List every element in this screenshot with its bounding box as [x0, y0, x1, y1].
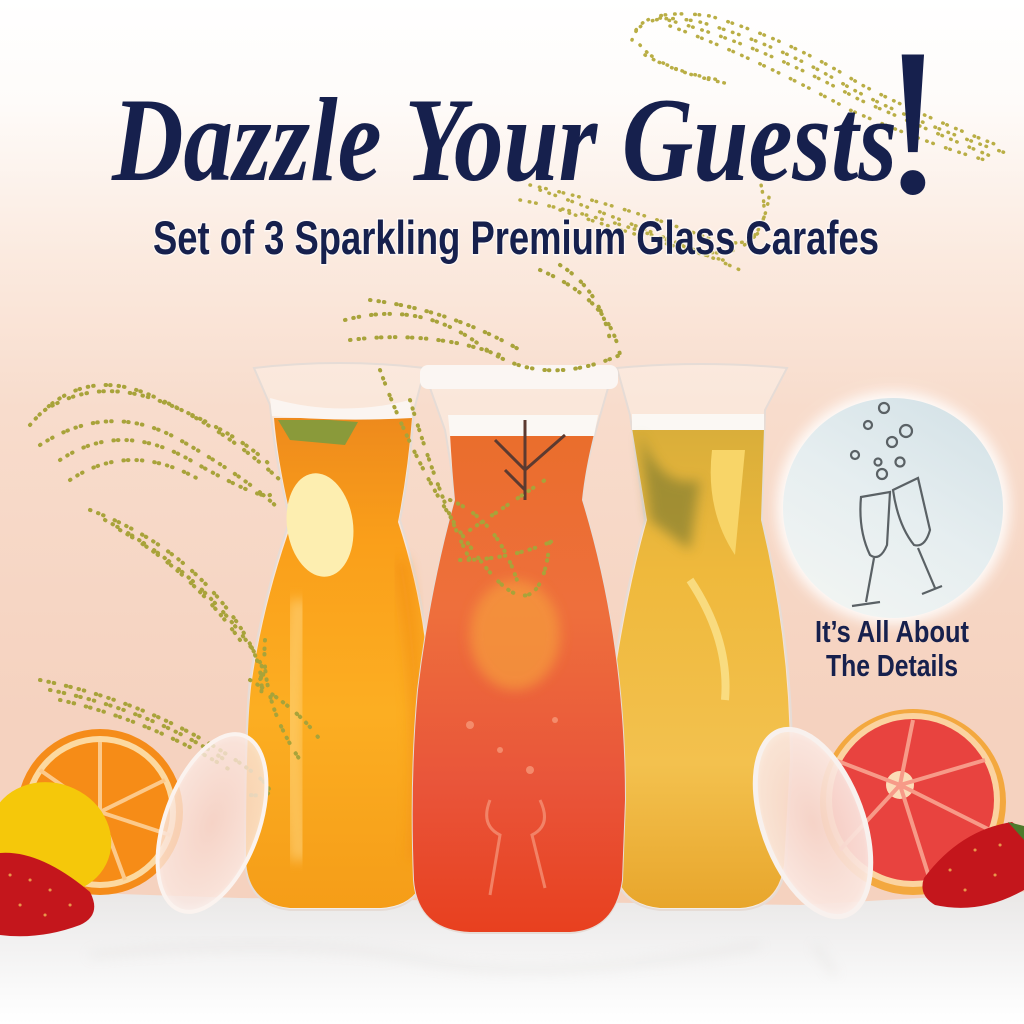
lemon [0, 765, 127, 911]
strawberry left [0, 853, 94, 936]
title [111, 6, 948, 238]
badge caption: It’s All About [815, 614, 969, 649]
carafe: left, orange [245, 363, 432, 910]
marble table [0, 890, 1024, 1024]
badge caption: The Details [826, 648, 958, 683]
badge caption [815, 614, 969, 683]
carafe: right, yellow [611, 364, 792, 910]
orange half [17, 729, 183, 895]
lid: left [136, 720, 288, 926]
glitter trail: left swirl and over carafes [30, 265, 620, 795]
strawberry right [922, 822, 1024, 908]
glitter trail: top right [520, 14, 1012, 270]
title: ! [878, 6, 948, 238]
icon: champagne glasses and bubbles [851, 403, 942, 606]
carafe: center, red [413, 365, 625, 933]
grapefruit [820, 709, 1006, 895]
lid: right [732, 714, 894, 932]
detail badge: champagne glasses [777, 392, 1009, 624]
